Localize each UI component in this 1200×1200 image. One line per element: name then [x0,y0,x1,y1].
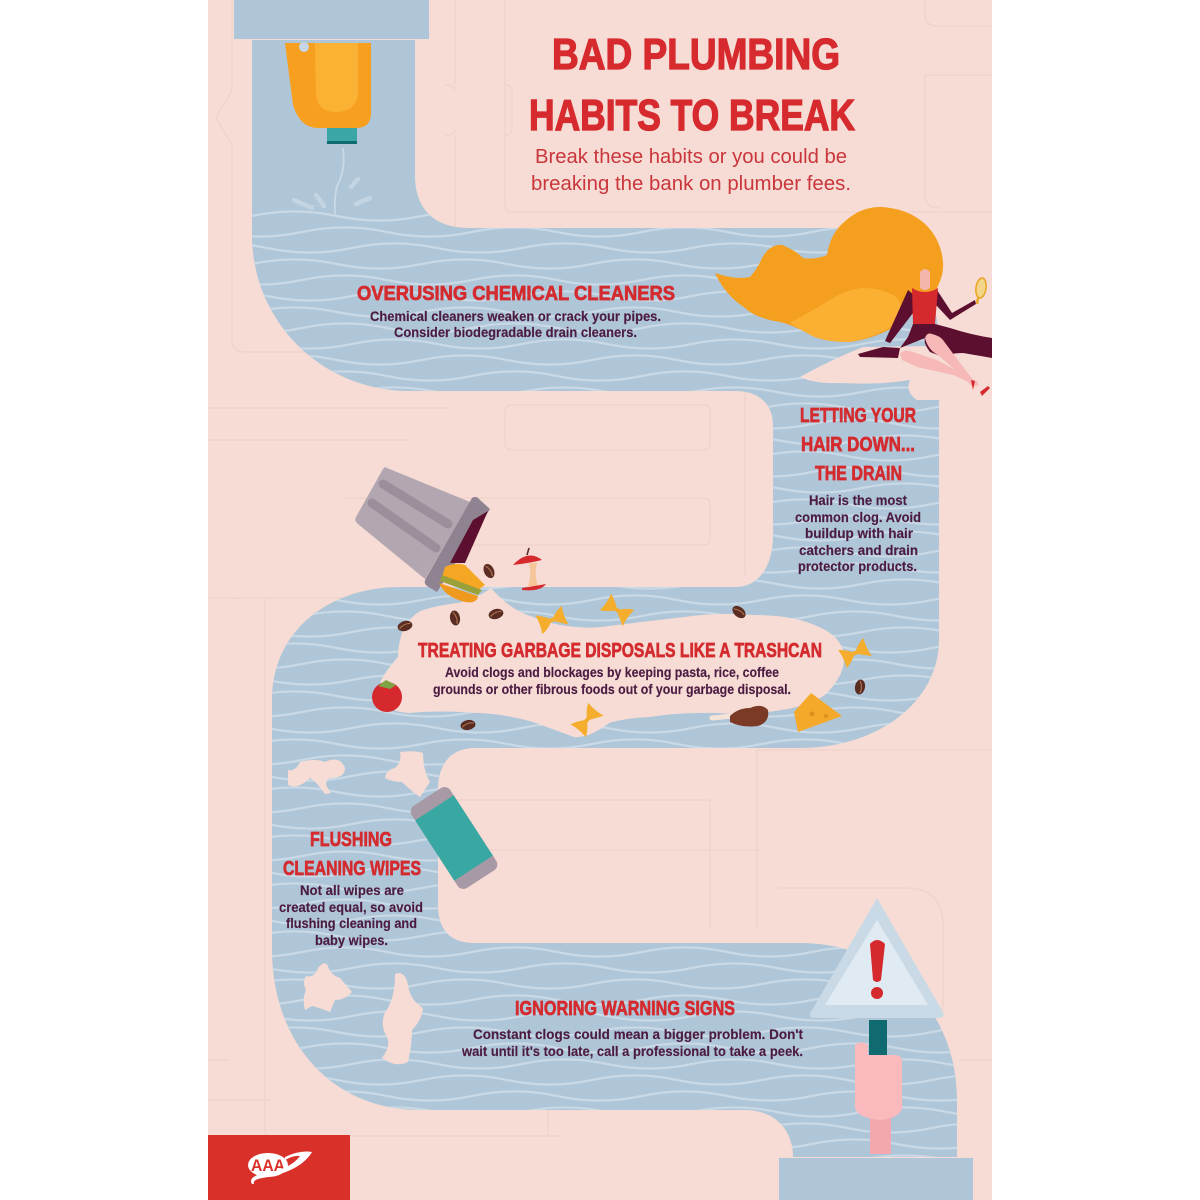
subtitle: Break these habits or you could be [535,146,847,168]
hand mirror [975,277,987,299]
icon: cheese wedge [794,693,842,732]
text block: ignoring warning signs [461,997,803,1059]
logo: AAA: AAA [251,1156,285,1175]
woman figure [858,324,992,358]
icon: tomato [372,680,402,712]
text block: flushing cleaning wipes: baby wipes. [315,933,388,948]
icon: apple core [513,548,546,590]
icon: tipped trash can [355,467,490,592]
cut-out for food spill [380,588,844,737]
icon: burger [439,564,485,602]
text block: treating garbage disposals: TREATING GARBAGE DISPOSALS LIKE A TRASHCAN [418,639,822,662]
text block: letting your hair down: LETTING YOUR [800,404,916,427]
text block: letting your hair down: protector products. [798,559,917,574]
text block: treating garbage disposals [418,639,822,697]
text block: overusing chemical cleaners [357,282,675,340]
icons: wipe cut-outs [288,751,430,1064]
text block: ignoring warning signs: IGNORING WARNING SIGNS [515,997,735,1020]
bottom pipe flange [779,1158,973,1200]
subtitle: breaking the bank on plumber fees. [531,173,851,195]
logo: AAA [208,1135,350,1200]
text block: flushing cleaning wipes: CLEANING WIPES [283,857,421,880]
cut-out ledge under woman [800,346,939,400]
poster background [208,0,992,1200]
text block: treating garbage disposals: Avoid clogs and blockages by keeping pasta, rice, coffee [445,665,779,680]
subtitle [531,146,851,195]
icons: coffee beans [396,562,866,731]
icon: chicken leg [712,706,768,726]
pipe [252,40,957,1157]
text block: flushing cleaning wipes: Not all wipes are [300,883,404,898]
poster [208,0,992,1200]
icons: bowtie pasta [535,594,872,737]
text block: letting your hair down: catchers and drain [799,543,918,558]
icon: cleaner bottle [285,42,371,214]
hair [715,207,943,342]
top pipe flange [234,0,429,39]
text block: flushing cleaning wipes [279,828,423,948]
text block: overusing chemical cleaners: Consider biodegradable drain cleaners. [394,325,637,340]
text block: letting your hair down: HAIR DOWN... [801,433,915,456]
text block: letting your hair down: buildup with hair [805,526,914,541]
text block: letting your hair down: common clog. Avoid [795,510,921,525]
text block: flushing cleaning wipes: FLUSHING [310,828,392,851]
illustration: woman with long hair [715,207,992,396]
text block: ignoring warning signs: wait until it's too late, call a professional to take a peek. [461,1044,803,1059]
text block: flushing cleaning wipes: created equal, so avoid [279,900,423,915]
title: BAD PLUMBING [552,30,840,79]
title: HABITS TO BREAK [529,91,855,140]
text block: letting your hair down: Hair is the most [809,493,907,508]
text block: flushing cleaning wipes: flushing cleaning and [286,916,417,931]
text block: treating garbage disposals: grounds or other fibrous foods out of your garbage disposal. [433,682,791,697]
text block: overusing chemical cleaners: OVERUSING CHEMICAL CLEANERS [357,282,675,305]
text block: letting your hair down [795,404,921,574]
icon: wipes canister [410,787,498,889]
text block: ignoring warning signs: Constant clogs could mean a bigger problem. Don't [473,1027,803,1042]
title [530,38,856,132]
text block: overusing chemical cleaners: Chemical cleaners weaken or crack your pipes. [370,309,661,324]
icon: warning sign and hand [810,898,943,1154]
text block: letting your hair down: THE DRAIN [815,462,902,485]
